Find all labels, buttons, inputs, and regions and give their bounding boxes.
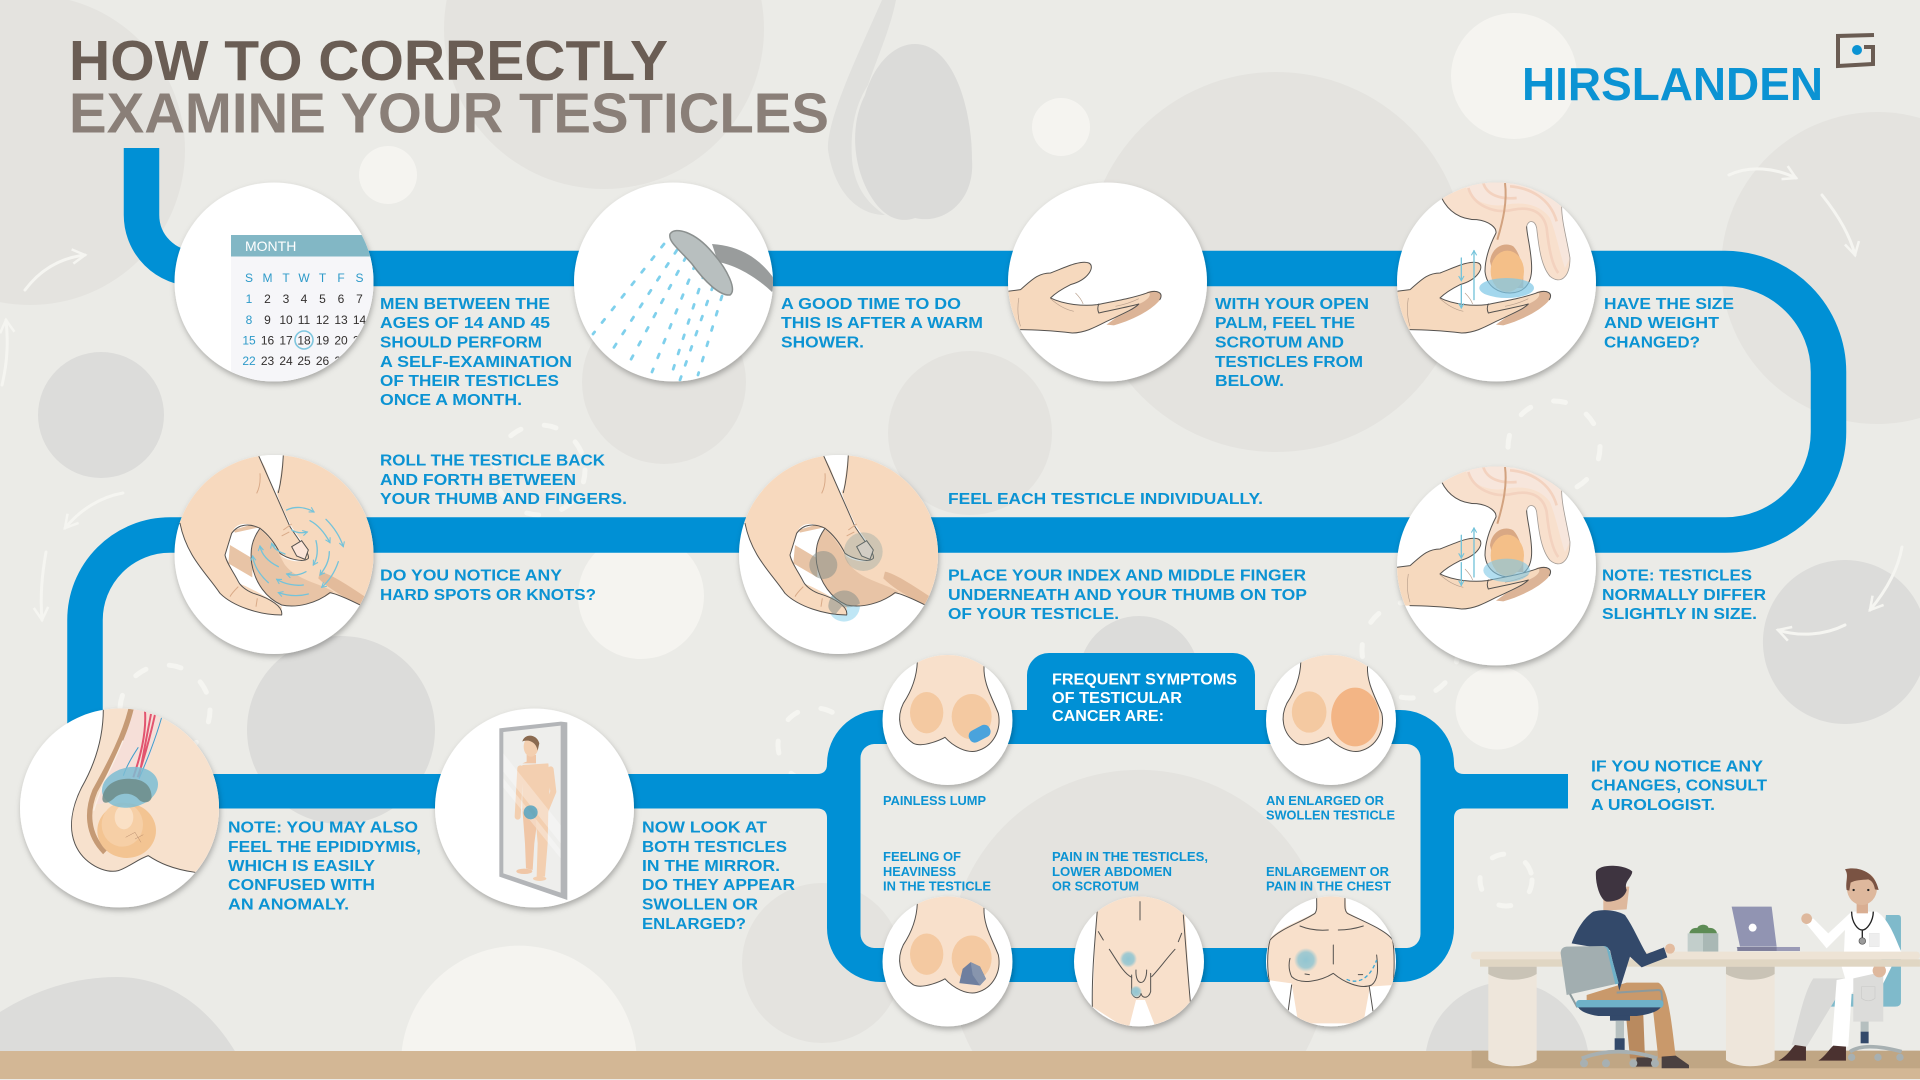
- icon: calendar: S: [355, 271, 364, 285]
- text: epididymis note: FEEL THE EPIDIDYMIS,: [228, 839, 421, 856]
- text: epididymis note: [228, 820, 421, 914]
- icon: calendar: 26: [316, 354, 329, 368]
- text: consult a urologist: CHANGES, CONSULT: [1591, 778, 1767, 794]
- icon: rolling the testicle: [167, 447, 383, 654]
- panel: symptoms header: FREQUENT SYMPTOMS: [1052, 672, 1237, 688]
- icon: calendar: 25: [297, 354, 311, 368]
- panel: symptoms header: OF TESTICULAR: [1052, 690, 1182, 707]
- text: step 3: [1215, 296, 1369, 390]
- text: step 3: TESTICLES FROM: [1215, 354, 1363, 371]
- text: mirror: DO THEY APPEAR: [642, 877, 795, 894]
- text: step 2: [781, 296, 983, 352]
- icon: epididymis anatomy: [20, 704, 228, 908]
- text: abdominal pain: PAIN IN THE TESTICLES,: [1052, 849, 1208, 864]
- icon: calendar: 7: [356, 292, 363, 306]
- text: abdominal pain: OR SCROTUM: [1052, 878, 1139, 894]
- icon: calendar: 22: [242, 354, 256, 368]
- text: size note: NORMALLY DIFFER: [1602, 587, 1766, 604]
- text: step 2: THIS IS AFTER A WARM: [781, 315, 983, 332]
- text: step 1: MEN BETWEEN THE: [380, 296, 550, 313]
- text: consult a urologist: [1591, 758, 1767, 814]
- icon: calendar: 9: [264, 313, 271, 327]
- icon: calendar: 16: [261, 334, 274, 348]
- icon: calendar: S: [245, 271, 253, 285]
- text: mirror: NOW LOOK AT: [642, 820, 767, 836]
- text: roll: YOUR THUMB AND FINGERS.: [380, 491, 627, 508]
- title: EXAMINE YOUR TESTICLES: [69, 82, 829, 146]
- text: step 4: CHANGED?: [1604, 334, 1700, 352]
- text: hard spots: [380, 568, 596, 604]
- icon: man in mirror: [435, 708, 634, 908]
- icon: calendar: 10: [279, 313, 293, 327]
- text: step 4: AND WEIGHT: [1604, 315, 1719, 332]
- icon: calendar: 20: [334, 334, 348, 348]
- text: step 1: SHOULD PERFORM: [380, 334, 542, 352]
- icon: calendar: 5: [319, 292, 326, 306]
- blue path connecting the steps: [85, 148, 1828, 982]
- text: roll: [380, 452, 627, 508]
- text: roll: ROLL THE TESTICLE BACK: [380, 452, 605, 470]
- logo: Hirslanden: HIRSLANDEN: [1522, 58, 1823, 110]
- icon: calendar: 14: [353, 313, 366, 327]
- icon: painless lump: [882, 647, 1012, 785]
- panel: symptoms header: CANCER ARE:: [1052, 708, 1164, 725]
- icon: calendar: 15: [242, 334, 256, 348]
- icon: calendar: 18: [297, 334, 311, 348]
- icon: chest: [1266, 890, 1396, 1026]
- text: enlarged testicle: [1266, 793, 1395, 822]
- text: mirror: SWOLLEN OR: [642, 896, 758, 914]
- text: hard spots: HARD SPOTS OR KNOTS?: [380, 587, 596, 604]
- floor shadow: [1472, 1051, 1920, 1068]
- icon: calendar: F: [337, 271, 345, 285]
- icon: calendar: 6: [338, 292, 345, 306]
- illustration: patient and doctor at desk: [1471, 866, 1920, 1068]
- icon: enlarged testicle: [1266, 647, 1396, 785]
- text: step 3: PALM, FEEL THE: [1215, 315, 1355, 332]
- icon: calendar: T: [319, 271, 327, 285]
- icon: calendar: M: [262, 271, 272, 285]
- text: step 4: HAVE THE SIZE: [1604, 296, 1734, 313]
- icon: calendar: 2: [264, 292, 271, 306]
- icon: calendar: 8: [246, 313, 253, 327]
- icon: calendar: 11: [298, 313, 311, 327]
- icon: calendar: [174, 182, 381, 386]
- logo: Hirslanden: [1522, 35, 1874, 110]
- text: step 2: A GOOD TIME TO DO: [781, 296, 961, 313]
- laptop: [1732, 907, 1800, 951]
- icon: calendar: 12: [316, 313, 329, 327]
- icon: heaviness: [882, 888, 1012, 1026]
- text: chest: [1266, 864, 1391, 894]
- plant: [1688, 925, 1718, 952]
- icon: hand weighing, second view: [1397, 462, 1596, 666]
- text: step 2: SHOWER.: [781, 334, 864, 352]
- text: mirror: [642, 820, 795, 933]
- desk legs: [1488, 967, 1775, 1066]
- doctor: [1778, 868, 1904, 1061]
- text: enlarged testicle: AN ENLARGED OR: [1266, 793, 1385, 808]
- text: enlarged testicle: SWOLLEN TESTICLE: [1266, 808, 1395, 822]
- text: size note: [1602, 568, 1766, 623]
- text: step 1: ONCE A MONTH.: [380, 392, 522, 409]
- text: mirror: BOTH TESTICLES: [642, 839, 787, 856]
- icon: calendar: W: [298, 271, 310, 285]
- icon: hand weighing: [1397, 178, 1596, 382]
- icon: lower abdomen: [1074, 890, 1204, 1030]
- text: epididymis note: WHICH IS EASILY: [228, 858, 375, 875]
- text: heaviness: HEAVINESS: [883, 864, 956, 879]
- text: roll: AND FORTH BETWEEN: [380, 472, 576, 489]
- text: step 3: WITH YOUR OPEN: [1215, 296, 1369, 313]
- patient: [1561, 866, 1689, 1068]
- text: step 4: [1604, 296, 1734, 352]
- text: mirror: IN THE MIRROR.: [642, 858, 780, 875]
- icon: calendar: 3: [283, 292, 290, 306]
- text: step 1: A SELF-EXAMINATION: [380, 354, 572, 371]
- text: step 1: [380, 296, 572, 409]
- text: step 1: OF THEIR TESTICLES: [380, 373, 559, 390]
- icon: calendar: 24: [279, 354, 293, 368]
- text: chest: ENLARGEMENT OR: [1266, 864, 1390, 879]
- icon: calendar: T: [282, 271, 290, 285]
- icon: calendar: MONTH: [245, 238, 296, 254]
- icon: calendar: 1: [246, 292, 253, 306]
- text: consult a urologist: A UROLOGIST.: [1591, 797, 1715, 814]
- text: finger placement: UNDERNEATH AND YOUR THUMB ON TOP: [948, 587, 1307, 604]
- text: step 3: BELOW.: [1215, 373, 1284, 390]
- icon: open hand: [1007, 182, 1207, 382]
- icon: shower: [574, 182, 777, 382]
- title: [69, 29, 829, 146]
- text: painless lump: PAINLESS LUMP: [883, 793, 986, 808]
- icon: calendar: 17: [279, 334, 293, 348]
- icon: calendar: 21: [353, 334, 366, 348]
- text: heaviness: IN THE TESTICLE: [883, 878, 991, 894]
- decorative arrows: [2, 169, 1902, 634]
- text: finger placement: [948, 568, 1307, 623]
- icon: calendar: 13: [334, 313, 348, 327]
- icon: calendar: 27: [334, 354, 348, 368]
- text: size note: SLIGHTLY IN SIZE.: [1602, 606, 1757, 623]
- text: abdominal pain: LOWER ABDOMEN: [1052, 864, 1172, 879]
- text: finger placement: PLACE YOUR INDEX AND MIDDLE FINGER: [948, 568, 1306, 584]
- icon: fingers placed on testicle: [732, 447, 948, 654]
- text: epididymis note: AN ANOMALY.: [228, 896, 349, 914]
- text: finger placement: OF YOUR TESTICLE.: [948, 606, 1119, 623]
- text: epididymis note: NOTE: YOU MAY ALSO: [228, 820, 418, 836]
- text: abdominal pain: [1052, 849, 1208, 894]
- icon: calendar: 23: [261, 354, 274, 368]
- text: chest: PAIN IN THE CHEST: [1266, 878, 1391, 894]
- panel: symptoms header: [1027, 653, 1255, 725]
- text: heaviness: FEELING OF: [883, 849, 961, 864]
- icon: calendar: 28: [353, 354, 366, 368]
- text: epididymis note: CONFUSED WITH: [228, 877, 375, 894]
- text: heaviness: [883, 849, 991, 894]
- text: step 3: SCROTUM AND: [1215, 334, 1344, 352]
- icon: calendar: 4: [301, 292, 308, 306]
- text: mirror: ENLARGED?: [642, 916, 746, 933]
- text: hard spots: DO YOU NOTICE ANY: [380, 568, 562, 584]
- text: size note: NOTE: TESTICLES: [1602, 568, 1752, 584]
- title: HOW TO CORRECTLY: [69, 29, 668, 93]
- icon: calendar: 19: [316, 334, 329, 348]
- text: step 1: AGES OF 14 AND 45: [380, 315, 550, 332]
- desk top: [1471, 952, 1920, 967]
- text: feel each testicle: FEEL EACH TESTICLE INDIVIDUALLY.: [948, 491, 1263, 508]
- floor: [0, 1051, 1920, 1079]
- text: consult a urologist: IF YOU NOTICE ANY: [1591, 758, 1763, 776]
